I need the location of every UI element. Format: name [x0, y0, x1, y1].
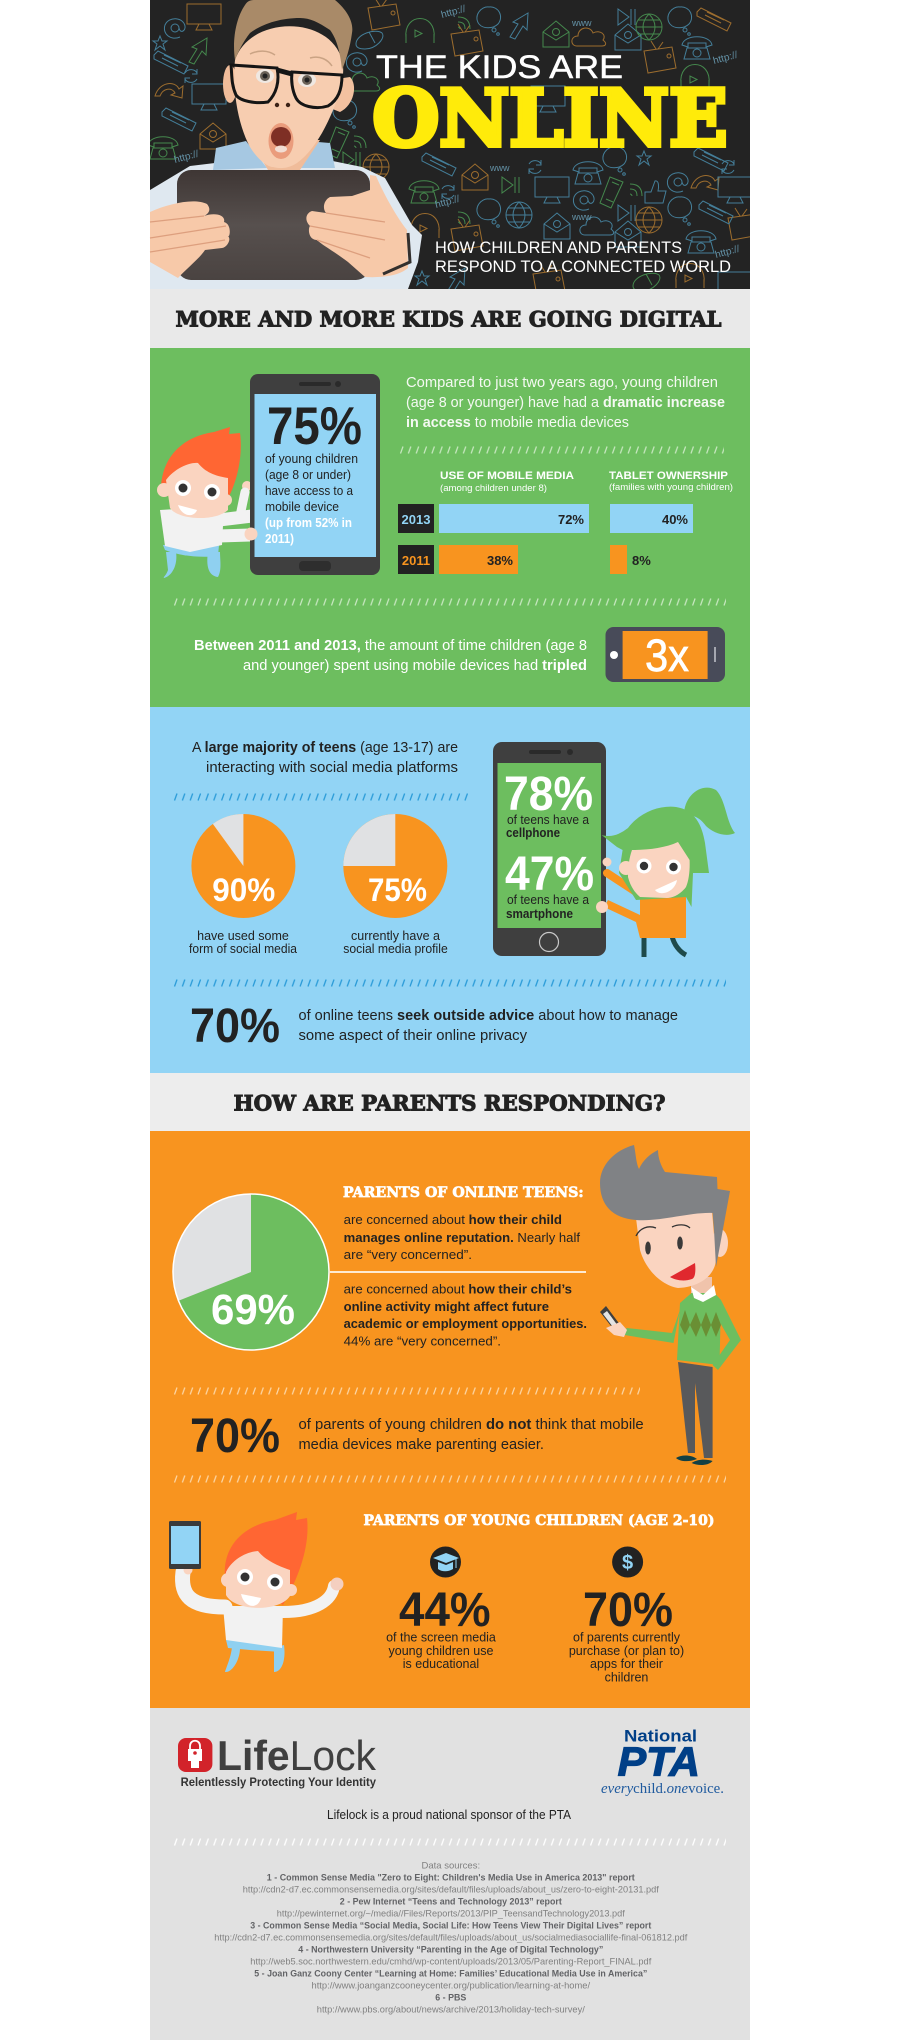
pie chart: 90%: 90% [212, 872, 275, 908]
text: data sources: 5 - Joan Ganz Coony Center “Learning at Home: Families’ Educational Media Use in America” [254, 1969, 648, 1980]
subtitle [435, 239, 731, 276]
bar chart: mobile media and tablets: (families with young children) [609, 482, 733, 493]
icon: phone with teen stats: of teens have a [507, 893, 589, 907]
logo: National PTA [601, 1727, 724, 1797]
stat: 70% privacy: some aspect of their online privacy [298, 1028, 528, 1044]
text: dramatic increase [406, 375, 725, 431]
icon: phone with teen stats: 47% [505, 848, 594, 901]
panel: heading band digital [150, 289, 750, 348]
text: large majority [192, 740, 458, 776]
character: orange-haired boy [157, 427, 252, 578]
text: tripled: and younger) spent using mobile devices had tripled [243, 658, 587, 674]
heading: parents of online teens: PARENTS OF ONLINE TEENS: [343, 1185, 584, 1201]
title: online: ONLINE [372, 74, 728, 164]
icon: phone with 75%: have access to a [265, 484, 353, 498]
character: green-haired girl [596, 788, 735, 957]
logo: LifeLock [178, 1732, 377, 1789]
panel: header banner [148, 0, 760, 298]
text: reputation concern [344, 1212, 580, 1262]
icon: phone with teen stats: smartphone [506, 907, 573, 921]
pie chart: 75%: currently have a [351, 929, 440, 943]
logo: National PTA: National [624, 1727, 697, 1746]
doodle pattern background: http:// [173, 149, 200, 166]
bar chart: mobile media and tablets: 8% [632, 553, 651, 568]
text: dramatic increase: in access to mobile media devices [406, 415, 629, 431]
text: data sources: http://web5.soc.northwestern.edu/cmhd/wp-content/uploads/2013/05/Parenting-Report_FINAL.pdf [250, 1957, 652, 1968]
text: tripled [194, 638, 587, 674]
logo: LifeLock: LifeLock [217, 1732, 377, 1779]
doodle pattern background: www [489, 163, 510, 173]
panel: orange parents [150, 1131, 750, 1708]
pie chart: 90% [189, 814, 297, 956]
icon: graduation cap [430, 1546, 461, 1578]
stat: 70% privacy: of online teens seek outside advice about how to manage [298, 1008, 678, 1024]
text: future concern: academic or employment opportunities. [344, 1316, 587, 1331]
text: data sources: http://pewinternet.org/~/media//Files/Reports/2013/PIP_TeensandTechnology2013.pdf [277, 1909, 625, 1920]
stat: 44% educational: 44% [399, 1584, 491, 1637]
text: data sources: 4 - Northwestern University “Parenting in the Age of Digital Technology” [298, 1945, 604, 1956]
pie chart: 90%: form of social media [189, 942, 297, 956]
icon: phone with 75%: 75% [267, 397, 362, 456]
stat: 44% educational: of the screen media [386, 1631, 496, 1645]
text: large majority: interacting with social media platforms [206, 760, 458, 776]
text: sponsor: Lifelock is a proud national sponsor of the PTA [327, 1808, 572, 1822]
bar chart: mobile media and tablets: (among children under 8) [440, 483, 547, 494]
icon: phone with teen stats: of teens have a [507, 813, 589, 827]
text: dramatic increase: (age 8 or younger) have had a dramatic increase [406, 395, 725, 411]
stat: 70% apps: of parents currently [573, 1631, 681, 1645]
doodle pattern background: http:// [434, 194, 461, 211]
stat: 70% apps: children [605, 1671, 648, 1685]
text: future concern: online activity might affect future [344, 1299, 549, 1314]
subtitle: RESPOND TO A CONNECTED WORLD [435, 258, 731, 276]
subtitle: HOW CHILDREN AND PARENTS [435, 239, 682, 257]
panel: green young children [150, 348, 750, 707]
bar chart: mobile media and tablets [398, 470, 733, 574]
character: man with phone [600, 1145, 741, 1465]
logo: LifeLock: Relentlessly Protecting Your Identity [181, 1775, 376, 1789]
text: data sources: 6 - PBS [435, 1993, 466, 2004]
text: future concern: are concerned about how their child’s [344, 1282, 572, 1297]
stat: 70% parents: of parents of young children do not think that mobile [298, 1417, 644, 1433]
pie chart: 75%: 75% [368, 872, 427, 908]
panel: footer [150, 1708, 750, 2040]
character: boy holding tablet [169, 1512, 344, 1672]
heading: MORE AND MORE KIDS ARE GOING DIGITAL [176, 308, 722, 332]
text: data sources: Data sources: [421, 1861, 480, 1872]
doodle pattern background: www [571, 18, 592, 28]
stat: 70% apps [569, 1546, 684, 1685]
icon: phone with teen stats [493, 742, 606, 956]
stat: 70% apps: 70% [583, 1584, 673, 1637]
bar chart: mobile media and tablets: 38% [487, 553, 513, 568]
stat: 70% apps: purchase (or plan to) [569, 1644, 684, 1658]
text: reputation concern: manages online reputation. Nearly half [344, 1230, 580, 1245]
stat: 44% educational [386, 1546, 496, 1671]
text: reputation concern: are concerned about how their child [344, 1212, 562, 1227]
icon: phone with 75%: (age 8 or under) [265, 468, 351, 482]
doodle pattern background [148, 0, 760, 298]
bar chart: mobile media and tablets: USE OF MOBILE MEDIA [440, 470, 574, 482]
stat: 70% apps: apps for their [590, 1657, 663, 1671]
pie chart: 75%: social media profile [343, 942, 448, 956]
panel: heading band parents [150, 1073, 750, 1131]
icon: landscape phone 3x [606, 627, 725, 682]
stat: 44% educational: is educational [403, 1657, 479, 1671]
stat: 70% parents: media devices make parenting easier. [298, 1437, 544, 1453]
logo: National PTA: everychild.onevoice. [601, 1781, 724, 1797]
pie chart: 90%: have used some [197, 929, 289, 943]
pie chart: 69%: 69% [211, 1286, 295, 1334]
doodle pattern background: http:// [440, 4, 467, 21]
bar chart: mobile media and tablets: 40% [662, 512, 688, 527]
photo: boy with tablet [150, 0, 422, 289]
text: data sources: 2 - Pew Internet “Teens and Technology 2013” report [340, 1897, 563, 1908]
pie chart: 69% [173, 1194, 329, 1350]
icon: phone with 75% [244, 374, 380, 575]
icon: phone with 75%: of young children [265, 452, 358, 466]
text: future concern [344, 1282, 587, 1349]
stat: 70% privacy [190, 1000, 678, 1053]
text: data sources: 1 - Common Sense Media "Zero to Eight: Children's Media Use in America 2013" report [267, 1873, 636, 1884]
icon: landscape phone 3x: 3x [645, 630, 689, 681]
icon: phone with teen stats: cellphone [506, 826, 560, 840]
text: data sources: http://www.pbs.org/about/news/archive/2013/holiday-tech-survey/ [317, 2005, 585, 2016]
text: data sources: http://cdn2-d7.ec.commonsensemedia.org/sites/default/files/uploads/about_us/socialmediasociallife-final-061812.pdf [214, 1933, 688, 1944]
icon: phone with 75%: (up from 52% in [265, 516, 352, 530]
icon: phone with teen stats: 78% [504, 768, 593, 821]
bar chart: mobile media and tablets: 2013 [402, 512, 430, 527]
icon: phone with 75%: mobile device [265, 500, 339, 514]
text: tripled: Between 2011 and 2013, the amount of time children (age 8 [194, 638, 587, 654]
logo: National PTA: PTA [618, 1739, 700, 1785]
title: the kids are: THE KIDS ARE [376, 49, 623, 85]
stat: 70% parents [190, 1410, 644, 1463]
text: reputation concern: are “very concerned”. [344, 1247, 472, 1262]
text: future concern: 44% are “very concerned”. [344, 1334, 501, 1349]
text: data sources [214, 1861, 688, 2016]
text: data sources: 3 - Common Sense Media “Social Media, Social Life: How Teens View Their Digital Lives” report [250, 1921, 652, 1932]
stat: 70% parents: 70% [190, 1410, 280, 1463]
text: data sources: http://cdn2-d7.ec.commonsensemedia.org/sites/default/files/uploads/about_us/zero-to-eight-20131.pdf [243, 1885, 659, 1896]
icon: dollar: $ [622, 1552, 633, 1574]
bar chart: mobile media and tablets: 2011 [402, 553, 430, 568]
panel: blue teens [150, 707, 750, 1073]
doodle pattern background: http:// [712, 50, 739, 67]
doodle pattern background: www [571, 212, 592, 222]
text: large majority: A large majority of teens (age 13-17) are [192, 740, 458, 756]
doodle pattern background: http:// [714, 244, 741, 261]
bar chart: mobile media and tablets: 72% [558, 512, 584, 527]
stat: 70% privacy: 70% [190, 1000, 280, 1053]
bar chart: mobile media and tablets: TABLET OWNERSHIP [609, 470, 728, 482]
pie chart: 75% [343, 814, 448, 956]
stat: 44% educational: young children use [389, 1644, 494, 1658]
heading: parents of young children: PARENTS OF YOUNG CHILDREN (AGE 2-10) [364, 1513, 714, 1529]
text: data sources: http://www.joanganzcooneycenter.org/publication/learning-at-home/ [312, 1981, 590, 1992]
heading: HOW ARE PARENTS RESPONDING? [234, 1092, 666, 1116]
icon: phone with 75%: 2011) [265, 532, 294, 546]
text: dramatic increase: Compared to just two years ago, young children [406, 375, 718, 391]
